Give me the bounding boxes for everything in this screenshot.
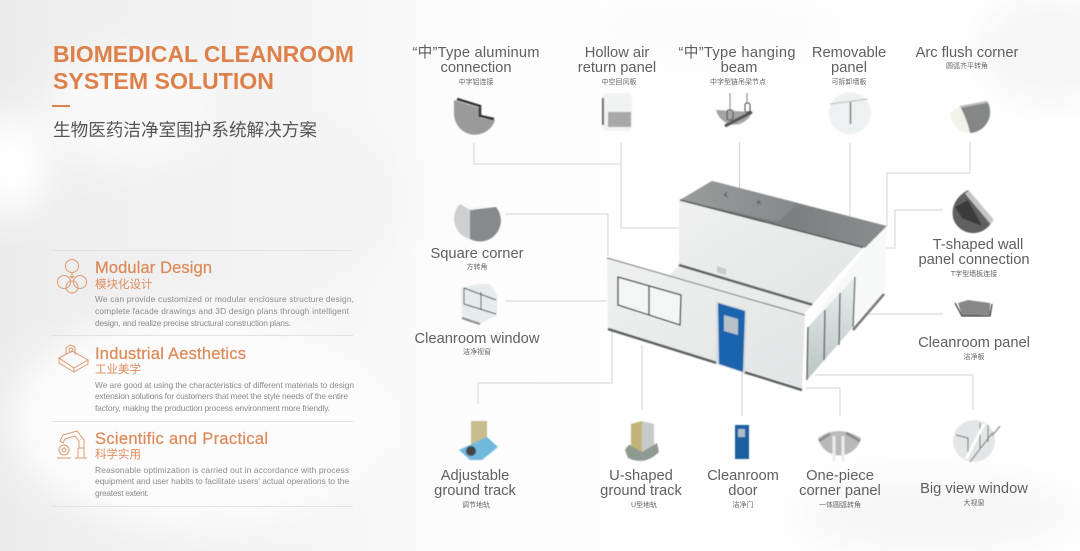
panel: scientific and practical: equipment and user habits to facilitate users' actual operations to the	[95, 476, 349, 486]
callout: cleanroom door: door	[728, 483, 758, 499]
title	[52, 41, 354, 140]
icon: robot arm	[57, 431, 87, 458]
icon: T connection	[953, 190, 993, 233]
callout: cleanroom door: Cleanroom	[707, 468, 779, 484]
callout: type hanging beam: 中字型链吊梁节点	[710, 77, 766, 86]
dividers	[52, 250, 353, 506]
icon: adjustable track	[459, 421, 498, 460]
panel: scientific and practical: Scientific and Practical	[95, 430, 268, 448]
big view glass	[805, 248, 865, 380]
panel: industrial aesthetics: We are good at using the characteristics of different materials to design	[95, 380, 354, 390]
callout: cleanroom door: 洁净门	[732, 500, 754, 509]
cleanroom window	[618, 277, 681, 325]
callout: type hanging beam: “中”Type hanging	[678, 44, 796, 61]
callout: cleanroom panel: Cleanroom panel	[918, 335, 1030, 351]
icon: modular hexagons	[58, 260, 86, 293]
panel: scientific and practical	[57, 430, 349, 498]
callout: arc flush corner: Arc flush corner	[916, 45, 1019, 61]
callout: adjustable ground track: ground track	[434, 483, 516, 499]
callout: one-piece corner panel: One-piece	[806, 468, 874, 484]
panel: modular design	[58, 259, 354, 328]
icon: arc flush corner	[950, 101, 990, 133]
panel: industrial aesthetics: extension solutions for customers that meet the style needs of the entire	[95, 391, 348, 401]
callout: T-shaped wall panel connection	[918, 190, 1030, 278]
blue door	[716, 301, 747, 373]
callout: one-piece corner panel	[799, 431, 881, 509]
callout: U-shaped ground track: U-shaped	[609, 468, 673, 484]
callout: removable panel	[812, 45, 886, 134]
icon: window detail	[461, 284, 497, 324]
icon: U track	[625, 421, 659, 461]
right side wall	[808, 226, 887, 380]
title: BIOMEDICAL CLEANROOM	[53, 41, 354, 67]
panel: industrial aesthetics: 工业美学	[95, 362, 141, 376]
callout: type aluminum connection: 中字铝连接	[458, 77, 494, 86]
connector lines	[474, 142, 973, 416]
callout: adjustable ground track	[434, 421, 516, 509]
callout: square corner: 方转角	[466, 262, 488, 271]
callout: one-piece corner panel: corner panel	[799, 483, 881, 499]
callout: type hanging beam: beam	[721, 60, 757, 76]
callout: big view window	[920, 420, 1028, 507]
icon: one-piece corner	[818, 431, 861, 461]
callout: cleanroom door	[707, 425, 779, 509]
callout: hollow air return panel: Hollow air	[585, 45, 649, 61]
panel: modular design: Modular Design	[95, 259, 212, 277]
floor strip	[668, 265, 813, 315]
panel: industrial aesthetics: Industrial Aesthetics	[95, 345, 246, 363]
panel: modular design: We can provide customized or modular enclosure structure design,	[95, 294, 354, 304]
callout: big view window: Big view window	[920, 481, 1028, 497]
callout: hollow air return panel	[578, 45, 656, 131]
callout: U-shaped ground track: U型地轨	[631, 500, 657, 509]
panel: modular design: design, and realize precise structural construction plans.	[95, 318, 291, 328]
callout: arc flush corner	[916, 45, 1019, 133]
callout: U-shaped ground track	[600, 421, 682, 509]
icon: big view	[953, 420, 1000, 462]
cleanroom 3D model	[607, 181, 887, 390]
callout: removable panel: panel	[831, 60, 867, 76]
back wall	[679, 200, 865, 305]
callout: U-shaped ground track: ground track	[600, 483, 682, 499]
icon: panel section	[955, 300, 992, 316]
panel: scientific and practical: greatest extent.	[95, 488, 149, 498]
icon: hanging beam	[716, 93, 752, 126]
callout: square corner	[430, 203, 524, 271]
callout: arc flush corner: 圆弧齐平转角	[946, 61, 988, 70]
icon: square corner	[454, 203, 501, 241]
callout: type aluminum connection: “中”Type aluminum	[412, 44, 540, 61]
front wall	[607, 258, 805, 388]
panel: scientific and practical: Reasonable optimization is carried out in accordance with process	[95, 465, 349, 475]
callout: cleanroom panel	[918, 300, 1030, 361]
callout: T-shaped wall panel connection: T字型墙板连接	[951, 269, 997, 278]
panel: scientific and practical: 科学实用	[95, 447, 141, 461]
icon: aluminum connection	[454, 99, 495, 135]
icon: door	[735, 425, 749, 459]
icon: return panel	[602, 93, 632, 131]
panel: modular design: 模块化设计	[95, 277, 153, 291]
panel: modular design: complete facade drawings and 3D design plans through intelligent	[95, 306, 350, 316]
callout: type hanging beam	[678, 44, 796, 126]
callout: hollow air return panel: 中空回风板	[602, 77, 636, 86]
callout: T-shaped wall panel connection: T-shaped wall	[933, 237, 1023, 253]
callout: adjustable ground track: 调节地轨	[462, 500, 490, 509]
panel: industrial aesthetics: factory, making the production process environment more friendly.	[95, 403, 330, 413]
callout: big view window: 大视窗	[964, 498, 984, 507]
callout: adjustable ground track: Adjustable	[441, 468, 509, 484]
callout: cleanroom window: Cleanroom window	[415, 331, 540, 347]
icon: removable panel	[829, 92, 871, 134]
callout: cleanroom window: 洁净视窗	[463, 347, 491, 356]
callout: one-piece corner panel: 一体圆弧转角	[819, 500, 861, 509]
callout: cleanroom panel: 洁净板	[964, 352, 984, 361]
callout: square corner: Square corner	[430, 246, 524, 262]
callout: type aluminum connection	[412, 44, 540, 135]
title: SYSTEM SOLUTION	[53, 68, 274, 94]
callout: T-shaped wall panel connection: panel connection	[918, 252, 1030, 268]
callout: removable panel: 可拆卸墙板	[832, 77, 866, 86]
callout: hollow air return panel: return panel	[578, 60, 656, 76]
callout: type aluminum connection: connection	[440, 60, 512, 76]
callout: removable panel: Removable	[812, 45, 886, 61]
return air vent	[717, 266, 726, 275]
roof	[680, 181, 887, 248]
panel: industrial aesthetics	[59, 345, 354, 413]
icon: industrial machine	[59, 345, 88, 372]
title: 生物医药洁净室围护系统解决方案	[53, 120, 317, 140]
callout: cleanroom window	[415, 284, 540, 356]
